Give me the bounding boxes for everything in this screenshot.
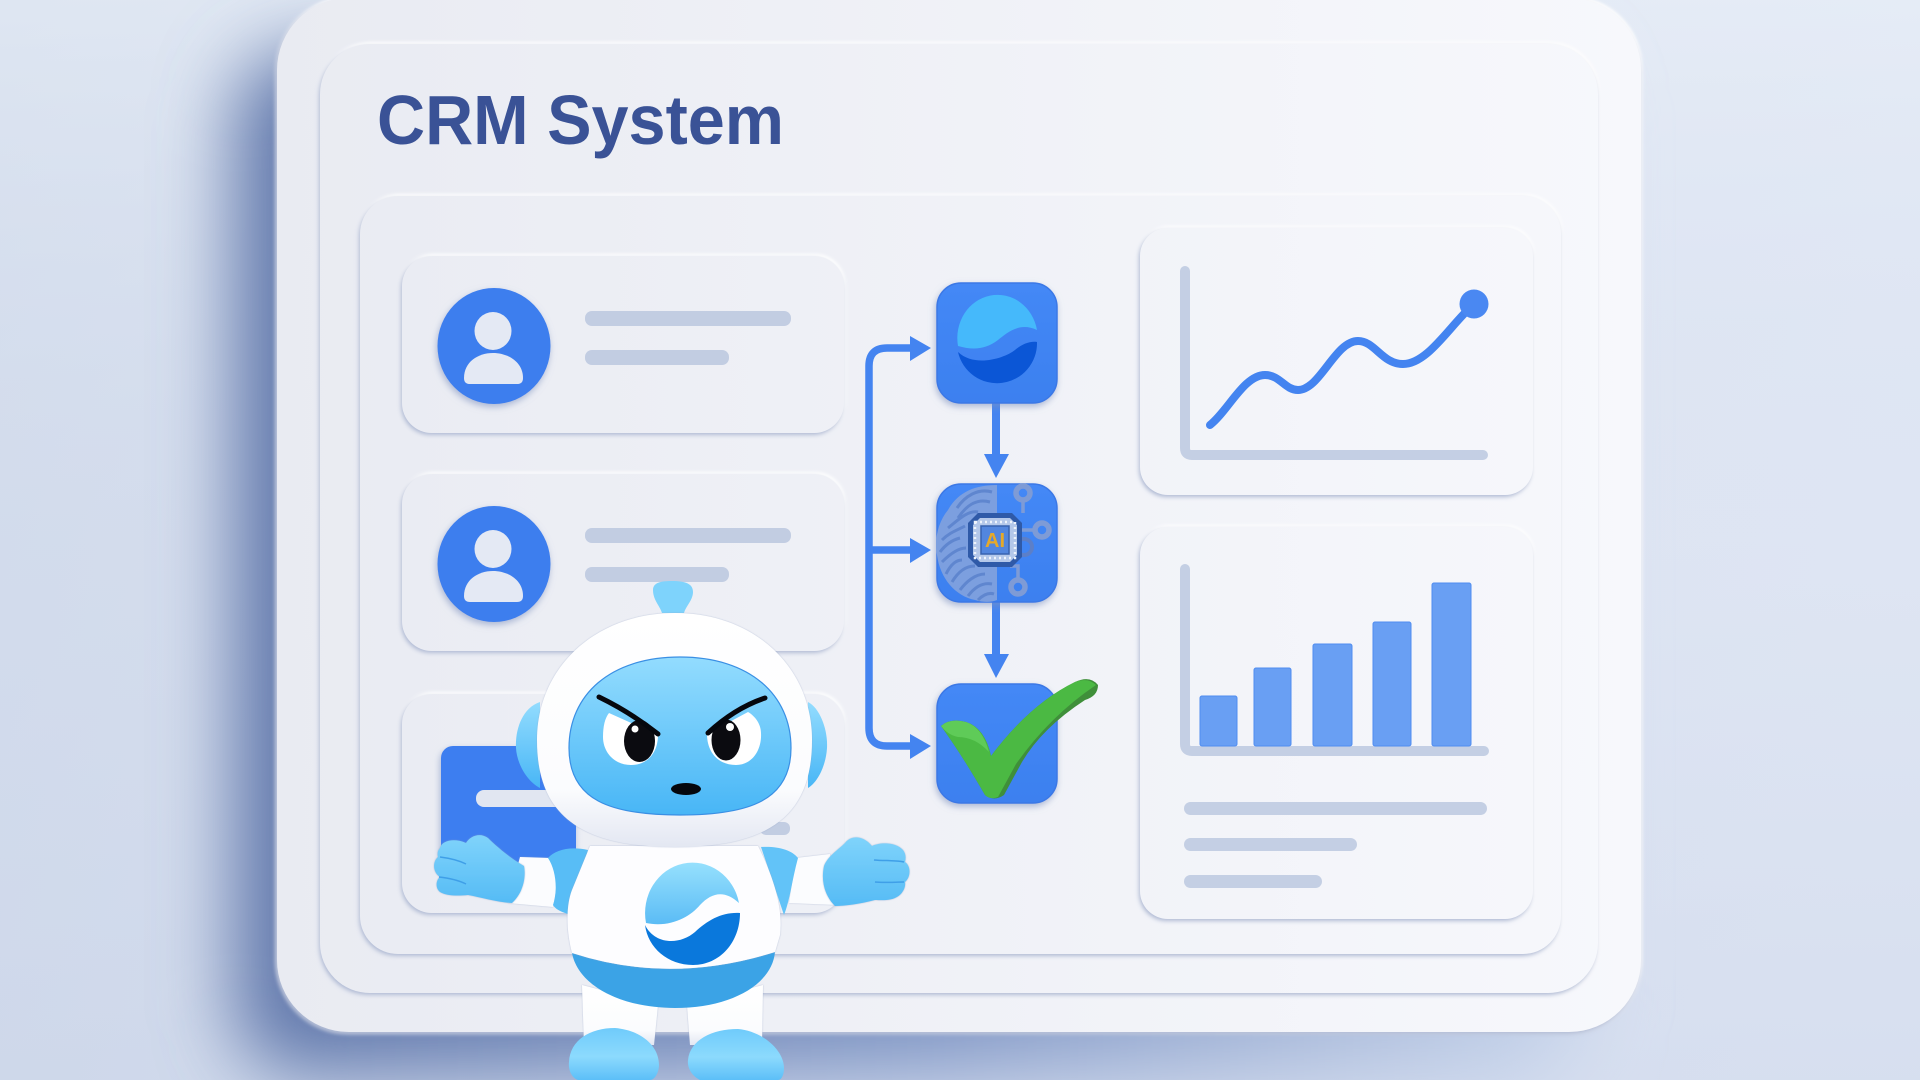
- flow connectors: [869, 336, 1009, 759]
- body: [568, 846, 781, 1008]
- text placeholder lines: [1184, 802, 1487, 888]
- panel: line chart: [1140, 228, 1533, 495]
- icon: chest logo: [645, 863, 740, 965]
- text placeholder lines: [585, 311, 791, 365]
- eyes: [603, 712, 761, 765]
- eyebrows: [599, 697, 765, 734]
- feet: [569, 1028, 784, 1080]
- bars: [1200, 583, 1471, 746]
- arrow: to check node: [910, 734, 931, 759]
- right arm: [761, 847, 838, 915]
- text placeholder line: [760, 822, 790, 835]
- arrow: logo to AI: [984, 403, 1009, 478]
- icon: brain half: [936, 485, 997, 602]
- panel: bar chart: [1140, 527, 1533, 919]
- icon: user avatar: [438, 288, 550, 404]
- robot mascot: [434, 581, 910, 1080]
- icon: green check mark: [941, 679, 1098, 798]
- arrow: to logo node: [910, 336, 931, 361]
- icon: blue message block: [441, 746, 576, 871]
- left hand: [434, 835, 525, 903]
- icon: user avatar: [438, 506, 550, 622]
- chart axes: [1185, 569, 1484, 751]
- antenna: [653, 581, 693, 613]
- panel: inner content: [360, 196, 1561, 954]
- panel: middle frame: [320, 44, 1598, 993]
- node: brand logo: [937, 283, 1057, 403]
- node: approval check: [937, 679, 1098, 803]
- panel shadow: [235, 50, 1585, 1075]
- head: [537, 613, 812, 847]
- chart axes: [1185, 271, 1483, 455]
- title: CRM System: [377, 81, 784, 159]
- icon: circuit nodes: [1010, 486, 1049, 594]
- card: message: [402, 694, 844, 913]
- arrow: AI to check: [984, 602, 1009, 678]
- legs: [582, 985, 763, 1045]
- arrow: to AI node: [910, 538, 931, 563]
- line series: [1210, 290, 1488, 425]
- card: contact two: [402, 474, 844, 651]
- text placeholder lines: [585, 528, 791, 582]
- left arm: [508, 848, 588, 916]
- ears: [516, 702, 827, 788]
- panel: outer frame: [277, 0, 1641, 1032]
- node: AI brain chip: [936, 484, 1057, 602]
- right hand: [823, 837, 910, 906]
- face screen: [569, 657, 791, 815]
- icon: AI chip: AI: [985, 530, 1005, 552]
- card: contact one: [402, 256, 844, 433]
- mouth: [671, 783, 701, 795]
